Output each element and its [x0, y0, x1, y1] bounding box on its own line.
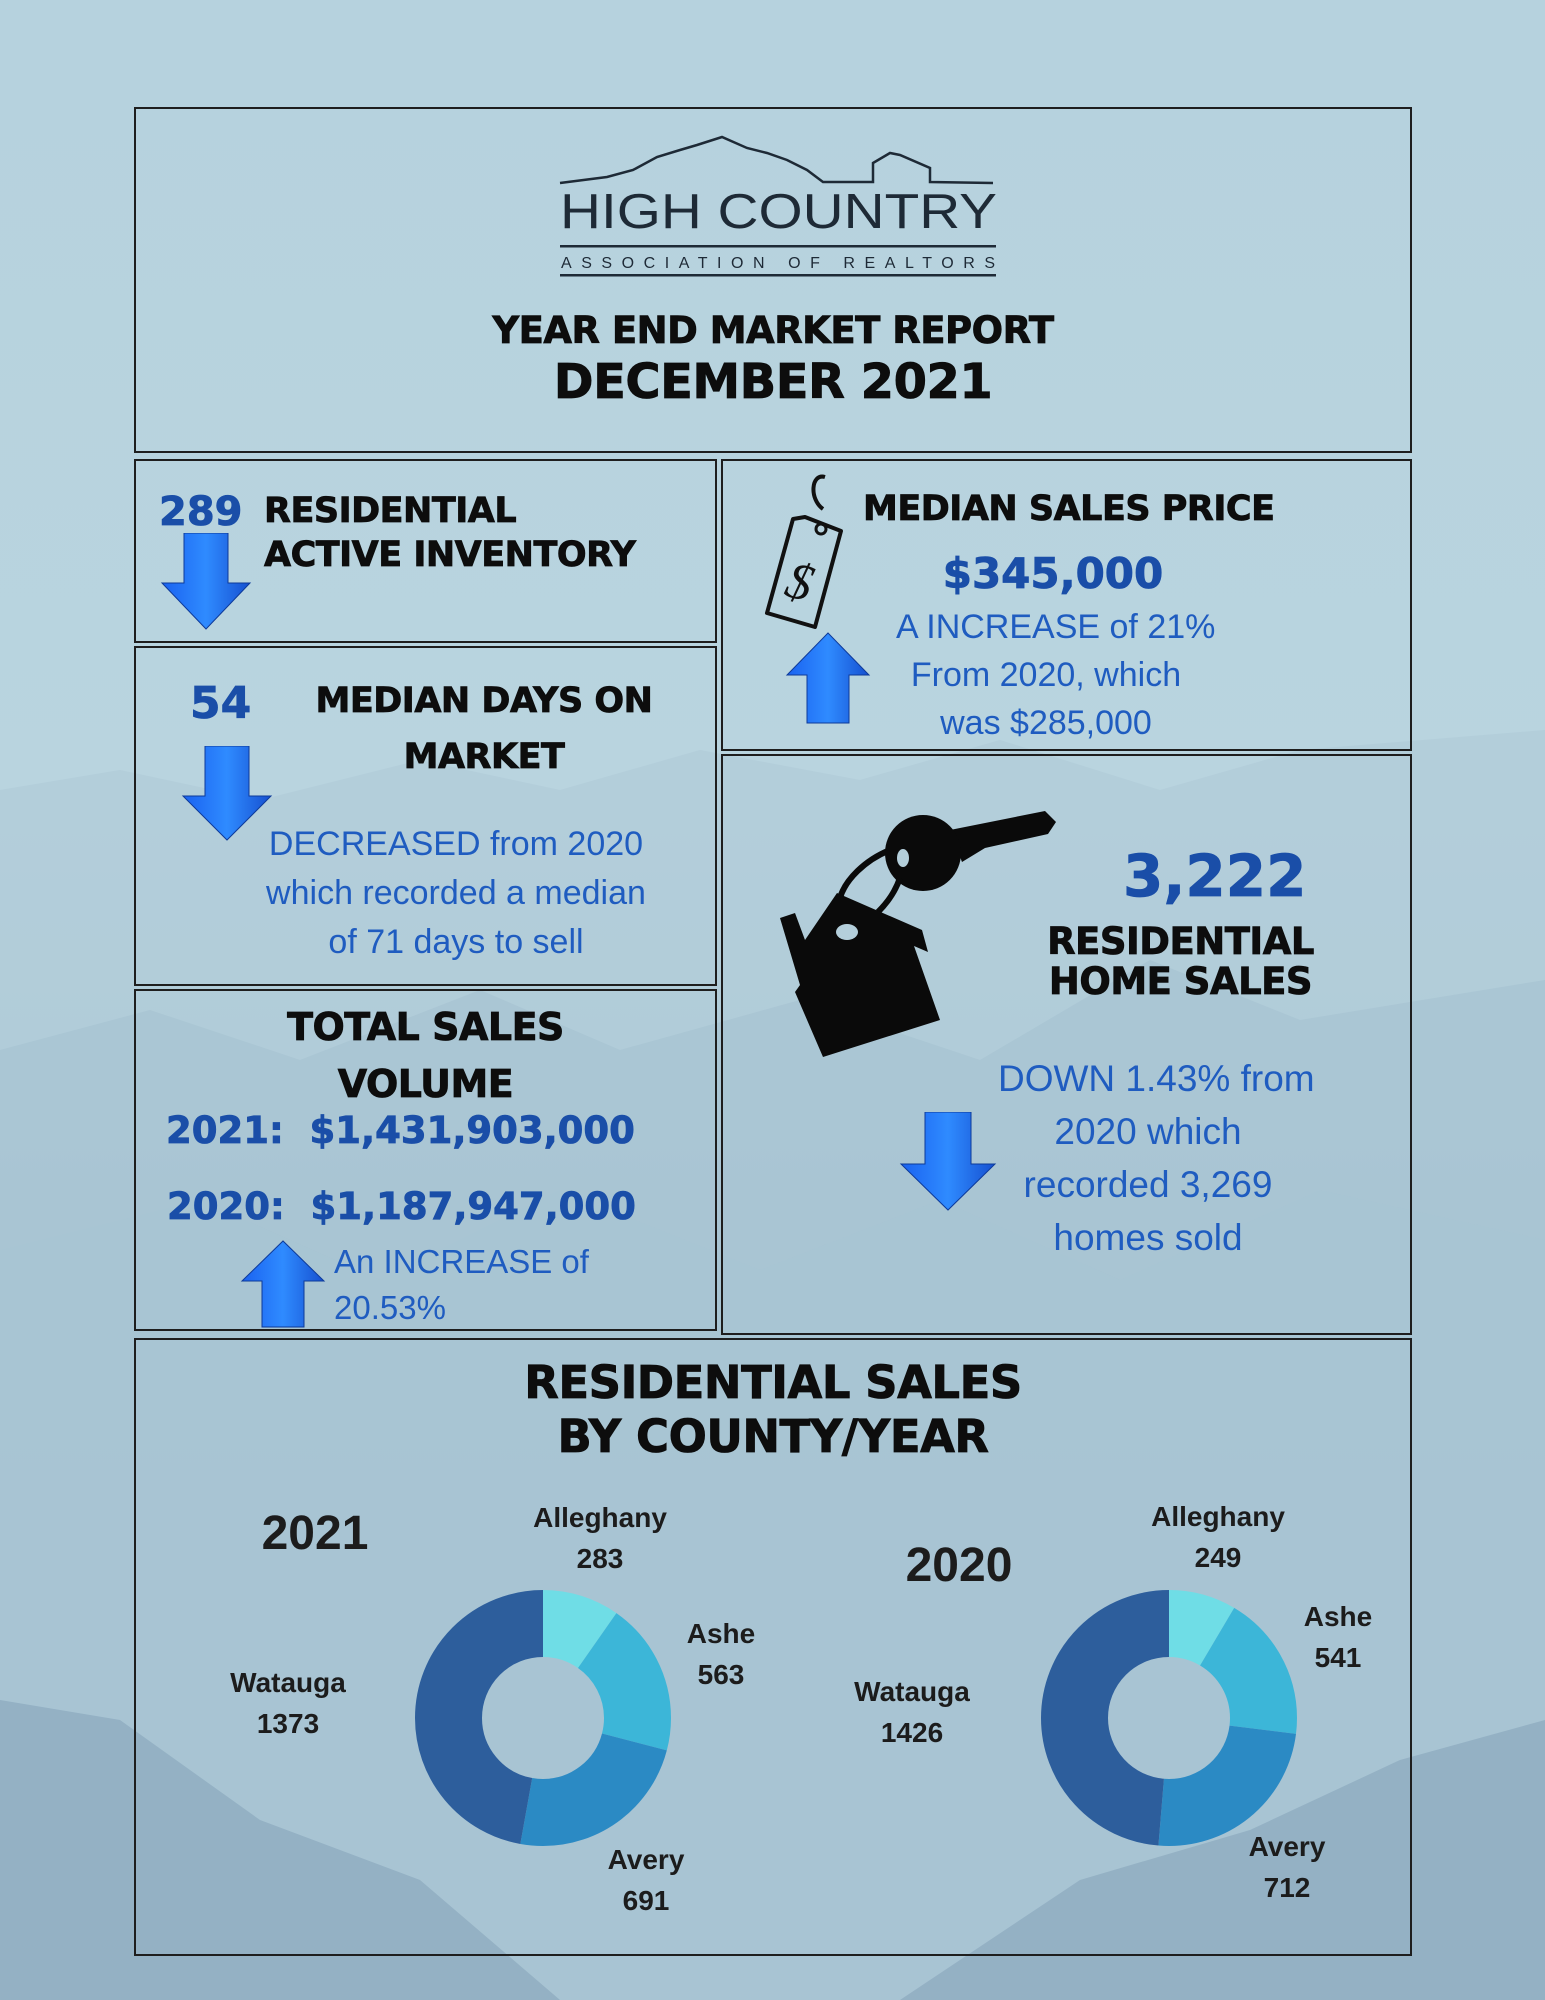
chart: 2021 donut: 563 [698, 1659, 744, 1690]
arrow down [900, 1112, 996, 1211]
panel: median sales price [721, 459, 1412, 751]
chart: 2020 donut: 712 [1264, 1872, 1310, 1903]
heading [524, 1356, 1022, 1463]
logo: HIGH COUNTRY [560, 185, 997, 239]
chart: 2020 donut: 249 [1195, 1542, 1241, 1573]
heading: MARKET [404, 737, 564, 777]
icon: price tag: $ [780, 552, 820, 613]
panel: median days [134, 646, 717, 986]
heading: MEDIAN SALES PRICE [863, 489, 1274, 529]
text: was $285,000 [940, 704, 1152, 742]
text: 20.53% [334, 1289, 446, 1326]
heading [1047, 920, 1314, 1003]
chart: 2021 donut: 691 [623, 1885, 669, 1916]
chart: 2020 donut: 1426 [881, 1717, 943, 1748]
heading: ACTIVE INVENTORY [264, 535, 635, 575]
title: YEAR END MARKET REPORT [492, 309, 1054, 352]
chart: 2020 donut: Alleghany [1151, 1501, 1285, 1532]
heading: RESIDENTIAL [1047, 920, 1314, 963]
text: homes sold [1053, 1217, 1243, 1258]
2020 value: 2020: $1,187,947,000 [167, 1185, 636, 1228]
text: From 2020, which [911, 656, 1181, 694]
text [896, 608, 1215, 742]
chart: 2021 donut: Avery [608, 1844, 684, 1875]
arrow down [160, 533, 252, 630]
panel: active inventory [134, 459, 717, 643]
year label: 2020 [906, 1539, 1012, 1592]
text: of 71 days to sell [328, 923, 584, 961]
text [998, 1058, 1315, 1258]
heading: BY COUNTY/YEAR [557, 1410, 989, 1463]
number 54: 54 [190, 678, 251, 729]
year label: 2021 [262, 1507, 368, 1560]
price: $345,000 [943, 549, 1163, 598]
chart: 2021 donut: Ashe [687, 1618, 755, 1649]
chart: 2021 donut: Alleghany [533, 1502, 667, 1533]
logo: ASSOCIATION OF REALTORS [561, 255, 995, 272]
heading: VOLUME [338, 1062, 513, 1106]
chart: 2020 donut: Watauga [854, 1676, 970, 1707]
2021 value: 2021: $1,431,903,000 [166, 1109, 635, 1152]
arrow up [786, 632, 870, 724]
heading: MEDIAN DAYS ON [316, 681, 652, 721]
chart: 2021 donut: Watauga [230, 1667, 346, 1698]
text: which recorded a median [266, 874, 646, 912]
chart: 2021 donut: 283 [577, 1543, 623, 1574]
panel: home sales [721, 754, 1412, 1335]
arrow down [182, 746, 272, 841]
logo [560, 136, 997, 276]
text: A INCREASE of 21% [896, 608, 1215, 646]
panel: sales by county [134, 1338, 1412, 1956]
text [334, 1243, 589, 1326]
chart: 2020 donut: Avery [1249, 1831, 1325, 1862]
heading [316, 681, 652, 777]
text: 2020 which [1054, 1111, 1242, 1152]
number 3,222: 3,222 [1123, 842, 1306, 910]
heading: RESIDENTIAL SALES [524, 1356, 1022, 1409]
text: DECREASED from 2020 [269, 825, 643, 863]
text: recorded 3,269 [1024, 1164, 1272, 1205]
chart: 2021 donut: 1373 [257, 1708, 319, 1739]
arrow up [240, 1240, 326, 1328]
heading [286, 1005, 564, 1106]
chart: 2020 donut [854, 1501, 1372, 1903]
icon: price tag [764, 474, 843, 629]
chart: 2021 donut [230, 1502, 755, 1916]
subtitle: DECEMBER 2021 [554, 354, 992, 410]
chart: 2020 donut: 541 [1315, 1642, 1361, 1673]
heading: HOME SALES [1049, 960, 1312, 1003]
icon: house key [780, 811, 1056, 1057]
number 289: 289 [159, 489, 242, 535]
text [266, 825, 646, 961]
chart: 2020 donut: Ashe [1304, 1601, 1372, 1632]
heading: TOTAL SALES [287, 1005, 564, 1049]
text: DOWN 1.43% from [998, 1058, 1315, 1099]
heading: RESIDENTIAL [264, 491, 516, 531]
header panel [134, 107, 1412, 453]
text: An INCREASE of [334, 1243, 589, 1280]
panel: total sales volume [134, 989, 717, 1331]
heading [264, 491, 637, 575]
